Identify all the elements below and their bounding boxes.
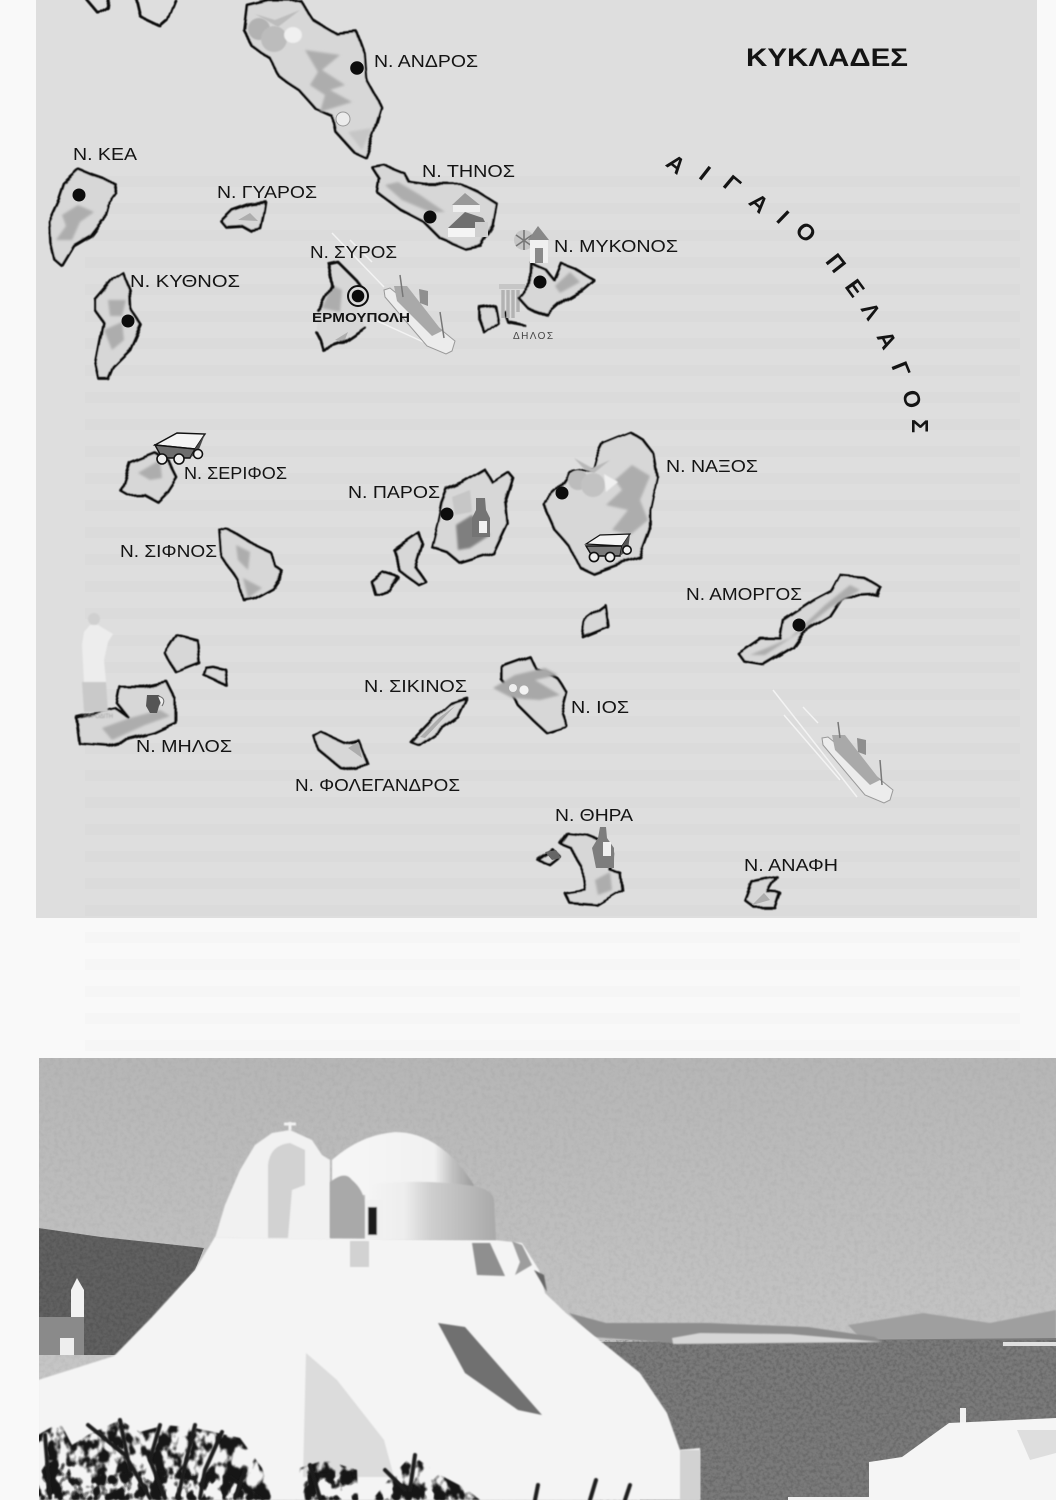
icon: windmill — [514, 226, 549, 263]
photo: Paraportiani church on Mykonos — [38, 1058, 1056, 1500]
icon: ship at sea — [773, 690, 893, 803]
photo sea — [585, 1338, 1056, 1500]
icon: amphora — [146, 695, 164, 713]
sea label: Aegean Pelagos: Ο — [790, 217, 822, 247]
photo sky — [39, 1058, 1056, 1500]
island: Iraklia — [583, 605, 608, 637]
island: Sikinos: Ν. ΣΙΚΙΝΟΣ — [364, 676, 467, 696]
sea label: Aegean Pelagos: Λ — [856, 298, 886, 325]
icon: Venus de Milo statue — [82, 613, 113, 720]
island: Antiparos and Despotiko — [372, 533, 426, 595]
sea label: Aegean Pelagos: Ι — [694, 161, 716, 185]
island: Naxos with fruit and mine cart: Ν. ΝΑΞΟΣ — [666, 456, 758, 476]
island: Kimolos and Polyaigos — [165, 635, 228, 687]
island: Delos and Rhenia — [480, 284, 553, 342]
photo dark bushes — [38, 1420, 630, 1500]
photo headland — [569, 1313, 882, 1343]
island: Folegandros — [295, 733, 460, 795]
island: Serifos with mine cart — [121, 433, 287, 502]
island: Syros with Ermoupoli: ΕΡΜΟΥΠΟΛΗ — [312, 311, 410, 325]
photo church body — [38, 1237, 700, 1500]
icon: mine cart — [586, 534, 631, 562]
island: Milos with amphora — [76, 682, 232, 756]
island: Sifnos — [120, 528, 283, 600]
island: Tinos with church: Ν. ΤΗΝΟΣ — [422, 161, 515, 181]
island: Delos and Rhenia: ΔΗΛΟΣ — [513, 331, 553, 342]
island: Kythnos: Ν. ΚΥΘΝΟΣ — [130, 271, 240, 291]
sea label: Aegean Pelagos: Ο — [897, 387, 927, 411]
island: Andros — [244, 0, 478, 157]
photo church shadows — [303, 1241, 700, 1500]
icon: church — [448, 193, 488, 237]
island: Gyaros — [217, 182, 317, 231]
photo dome and drum — [330, 1132, 496, 1240]
island: Serifos with mine cart: Ν. ΣΕΡΙΦΟΣ — [184, 463, 287, 483]
island: Anafi: Ν. ΑΝΑΦΗ — [744, 855, 838, 875]
islets at top-left edge — [87, 0, 175, 26]
island: Kythnos — [96, 271, 240, 379]
photo distant hills — [848, 1310, 1056, 1340]
island: Paros with grapes and bottle — [348, 470, 513, 563]
island: Syros with Ermoupoli: Ν. ΣΥΡΟΣ — [310, 242, 397, 262]
island: Paros with grapes and bottle: Ν. ΠΑΡΟΣ — [348, 482, 440, 502]
island: Tinos with church — [372, 161, 515, 249]
island: Sifnos: Ν. ΣΙΦΝΟΣ — [120, 541, 217, 561]
sea label: Aegean Pelagos: Α — [744, 188, 774, 218]
island: Mykonos with windmill — [514, 226, 678, 315]
island: Ios with olive branch: Ν. ΙΟΣ — [571, 697, 629, 717]
photo left hill — [38, 1228, 204, 1355]
island: Mykonos with windmill: Ν. ΜΥΚΟΝΟΣ — [554, 236, 678, 256]
island: Thira with bottle: Ν. ΘΗΡΑ — [555, 805, 633, 825]
island: Thira with bottle — [538, 805, 633, 905]
icon: temple columns — [499, 284, 525, 318]
island: Folegandros: Ν. ΦΟΛΕΓΑΝΔΡΟΣ — [295, 775, 460, 795]
island: Andros: Ν. ΑΝΔΡΟΣ — [374, 51, 478, 71]
island: Gyaros: Ν. ΓΥΑΡΟΣ — [217, 182, 317, 202]
title: ΚΥΚΛΑΔΕΣ — [746, 44, 908, 72]
sea label: Aegean Pelagos: Γ — [886, 358, 916, 380]
island: Amorgos — [686, 575, 880, 665]
icon: mine cart — [155, 433, 205, 464]
island: Syros with Ermoupoli — [310, 242, 410, 350]
panel: map background — [36, 0, 1037, 918]
photo belfry — [215, 1122, 330, 1240]
sea label: Aegean Pelagos: Α — [661, 149, 691, 179]
photo chimney and house at left — [38, 1278, 84, 1355]
sea label: Aegean Pelagos: Ε — [840, 274, 870, 302]
island: Milos with amphora: Ν. ΜΗΛΟΣ — [136, 736, 232, 756]
island: Kea: Ν. ΚΕΑ — [73, 144, 137, 164]
island: Naxos with fruit and mine cart — [543, 432, 758, 573]
photo white building at bottom right — [788, 1408, 1056, 1500]
icon: Venus de Milo statue: ΑΦΡΟΔΙΤΗ — [83, 714, 113, 720]
sea label: Aegean Pelagos: Γ — [718, 170, 746, 199]
sea label: Aegean Pelagos: Π — [821, 248, 851, 278]
sea label: Aegean Pelagos — [661, 149, 933, 433]
island: Sikinos — [364, 676, 467, 745]
island: Amorgos: Ν. ΑΜΟΡΓΟΣ — [686, 584, 802, 604]
island: Anafi — [744, 855, 838, 908]
icon: ship near Syros — [332, 233, 455, 354]
island: Kea — [49, 144, 137, 266]
island: Ios with olive branch — [493, 657, 629, 733]
sea label: Aegean Pelagos: Ι — [772, 205, 794, 229]
sea label: Aegean Pelagos: Σ — [907, 419, 933, 433]
sea label: Aegean Pelagos: Α — [872, 327, 902, 353]
